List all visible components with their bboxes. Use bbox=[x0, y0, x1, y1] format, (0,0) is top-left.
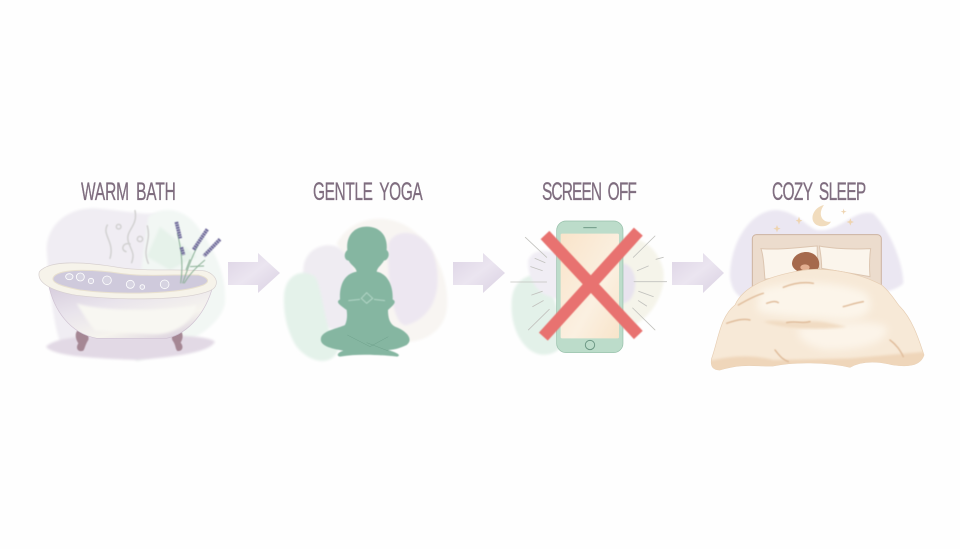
arrow 2 bbox=[453, 253, 505, 293]
heading: screen off: SCREEN OFF bbox=[542, 178, 637, 206]
duvet bbox=[707, 269, 927, 373]
tub rim bbox=[39, 263, 216, 299]
stars bbox=[773, 209, 854, 232]
signal lines bbox=[511, 236, 667, 330]
moon bbox=[812, 205, 831, 226]
phone speaker and button bbox=[583, 228, 597, 350]
duvet folds bbox=[727, 283, 903, 362]
red cross bbox=[543, 232, 638, 337]
tub body bbox=[48, 283, 213, 338]
panel: warm bath bbox=[39, 178, 225, 362]
panel: cozy sleep bbox=[707, 178, 927, 373]
illustration: crossed out phone bbox=[511, 221, 667, 355]
headboard bbox=[752, 235, 881, 295]
arrow 1 bbox=[228, 253, 280, 293]
bath water bbox=[53, 270, 208, 293]
icon: bubbles bbox=[66, 273, 169, 289]
panel: screen off bbox=[511, 178, 667, 355]
figure silhouette bbox=[321, 227, 410, 357]
illustration: bathtub with lavender bbox=[39, 208, 225, 362]
panel: gentle yoga bbox=[284, 178, 447, 361]
bath shadow bbox=[46, 336, 215, 360]
sleeper head bbox=[792, 252, 819, 272]
heading: gentle yoga: GENTLE YOGA bbox=[313, 178, 423, 206]
phone screen bbox=[561, 234, 619, 338]
icon: lavender bbox=[176, 222, 220, 283]
heading: cozy sleep: COZY SLEEP bbox=[772, 178, 866, 206]
figure arm and hand details bbox=[348, 293, 385, 303]
pillows bbox=[761, 246, 819, 279]
arrow 3 bbox=[672, 253, 724, 293]
heading: warm bath: WARM BATH bbox=[81, 178, 176, 206]
phone body bbox=[557, 221, 623, 353]
illustration: meditating figure bbox=[284, 219, 447, 361]
infographic canvas bbox=[38, 182, 924, 370]
tub feet bbox=[76, 330, 183, 351]
icon: steam bbox=[106, 211, 148, 263]
illustration: bed bbox=[707, 205, 927, 373]
